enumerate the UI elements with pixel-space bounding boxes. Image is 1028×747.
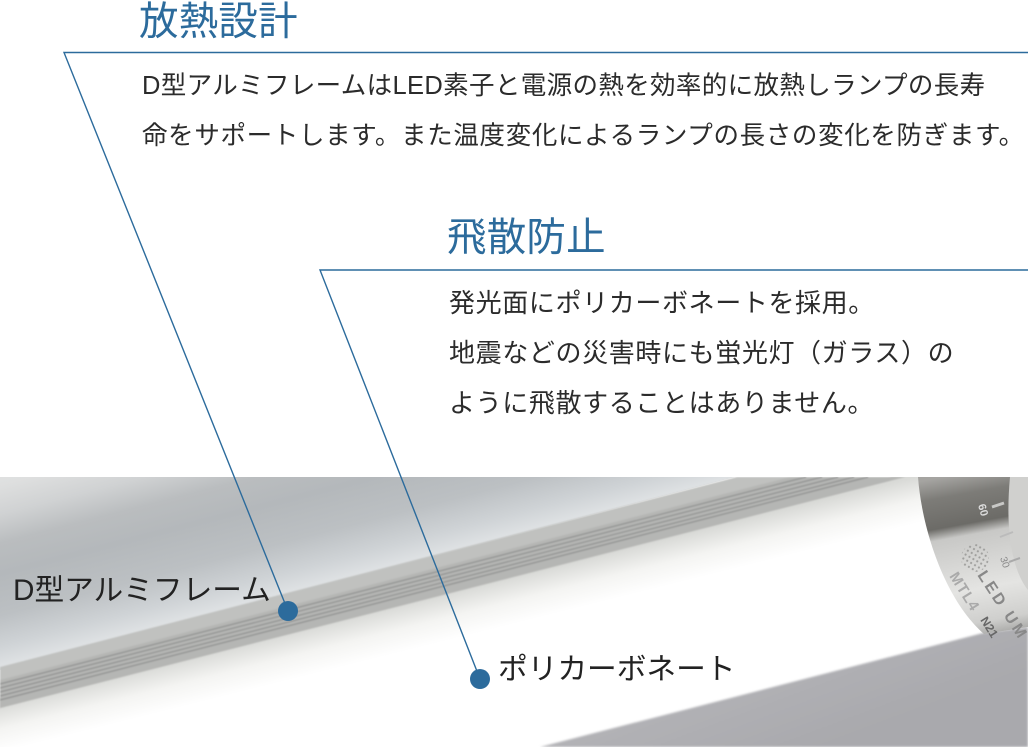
heading: shatter prevention: 飛散防止 <box>447 216 606 260</box>
text block: shatter prevention: 発光面にポリカーボネートを採用。 <box>449 288 875 318</box>
glow below frame <box>0 477 922 738</box>
text block: heat dissipation: 命をサポートします。また温度変化によるランプの長さの変化を防ぎます。 <box>142 122 1025 150</box>
text block: shatter prevention: 地震などの災害時にも蛍光灯（ガラス）の <box>449 338 954 368</box>
lamp end cap: MTL4 <box>946 569 983 615</box>
text block: heat dissipation <box>142 72 1025 150</box>
lamp end cap: N21 <box>977 614 1001 641</box>
heading: heat dissipation: 放熱設計 <box>139 0 298 44</box>
D-shaped aluminium frame <box>0 477 905 708</box>
photo: LED tube lamp <box>0 477 1028 747</box>
text block: shatter prevention: ように飛散することはありません。 <box>449 388 874 418</box>
label: D-shaped aluminium frame: D型アルミフレーム <box>13 574 271 607</box>
background above tube <box>0 477 734 670</box>
text block: heat dissipation: D型アルミフレームはLED素子と電源の熱を効率的に放熱しランプの長寿 <box>142 72 985 100</box>
text block: shatter prevention <box>449 288 954 418</box>
lamp end cap: 60 <box>975 503 990 518</box>
lower grey surface <box>540 627 1028 747</box>
lamp end cap: 30 <box>997 556 1011 570</box>
lamp end cap <box>918 477 1028 644</box>
label: polycarbonate: ポリカーボネート <box>498 653 736 686</box>
